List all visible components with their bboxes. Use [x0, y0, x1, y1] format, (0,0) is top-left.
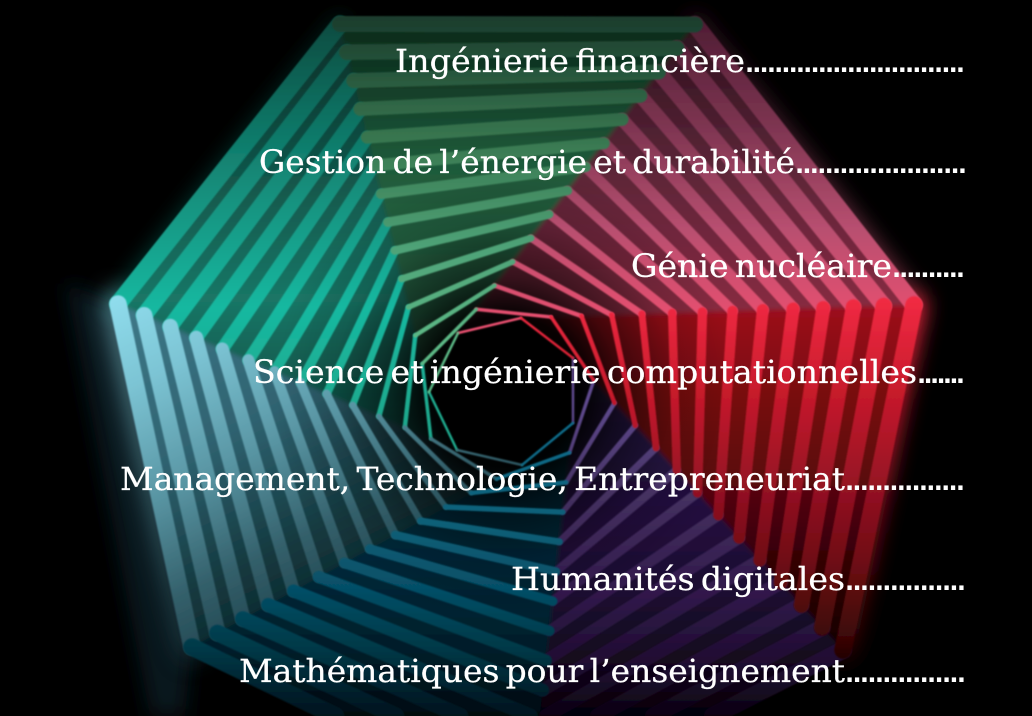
strips: green side	[340, 24, 695, 392]
label: Gestion de l’énergie et durabilité: Gestion de l’énergie et durabilité	[259, 145, 795, 181]
label: Ingénierie financière: ..............................	[745, 50, 965, 78]
label: Gestion de l’énergie et durabilité: .......................	[795, 151, 967, 179]
shadow left of the cyan side	[65, 282, 192, 716]
outer halo	[118, 24, 914, 650]
strips: blue side	[192, 423, 573, 716]
cyan halo	[118, 304, 192, 647]
label: Humanités digitales: Humanités digitales	[511, 562, 845, 598]
label: Génie nucléaire: Génie nucléaire	[631, 249, 892, 285]
label: Management, Technologie, Entrepreneuriat: ................	[845, 468, 965, 496]
sector fills	[118, 24, 914, 716]
central dark hole	[440, 330, 563, 453]
strips: purple side	[542, 358, 843, 716]
strips: teal side	[118, 24, 457, 450]
label: Ingénierie financière	[395, 44, 965, 80]
label: Science et ingénierie computationnelles: Science et ingénierie computationnelles	[253, 355, 917, 391]
label: Ingénierie financière: Ingénierie financière	[395, 44, 745, 80]
label: Management, Technologie, Entrepreneuriat: Management, Technologie, Entrepreneuriat	[120, 462, 845, 498]
label: Humanités digitales	[511, 562, 966, 598]
label: Génie nucléaire: ..........	[892, 255, 965, 283]
strips: cyan side	[118, 304, 522, 647]
label: Science et ingénierie computationnelles: .......	[917, 361, 965, 389]
strips: pink side	[458, 24, 914, 333]
central vignette	[275, 161, 735, 621]
label: Humanités digitales: ................	[845, 568, 966, 596]
label: Mathématiques pour l’enseignement: ................	[845, 660, 966, 688]
strips: red side	[521, 305, 914, 650]
label: Mathématiques pour l’enseignement: Mathématiques pour l’enseignement	[239, 654, 845, 690]
